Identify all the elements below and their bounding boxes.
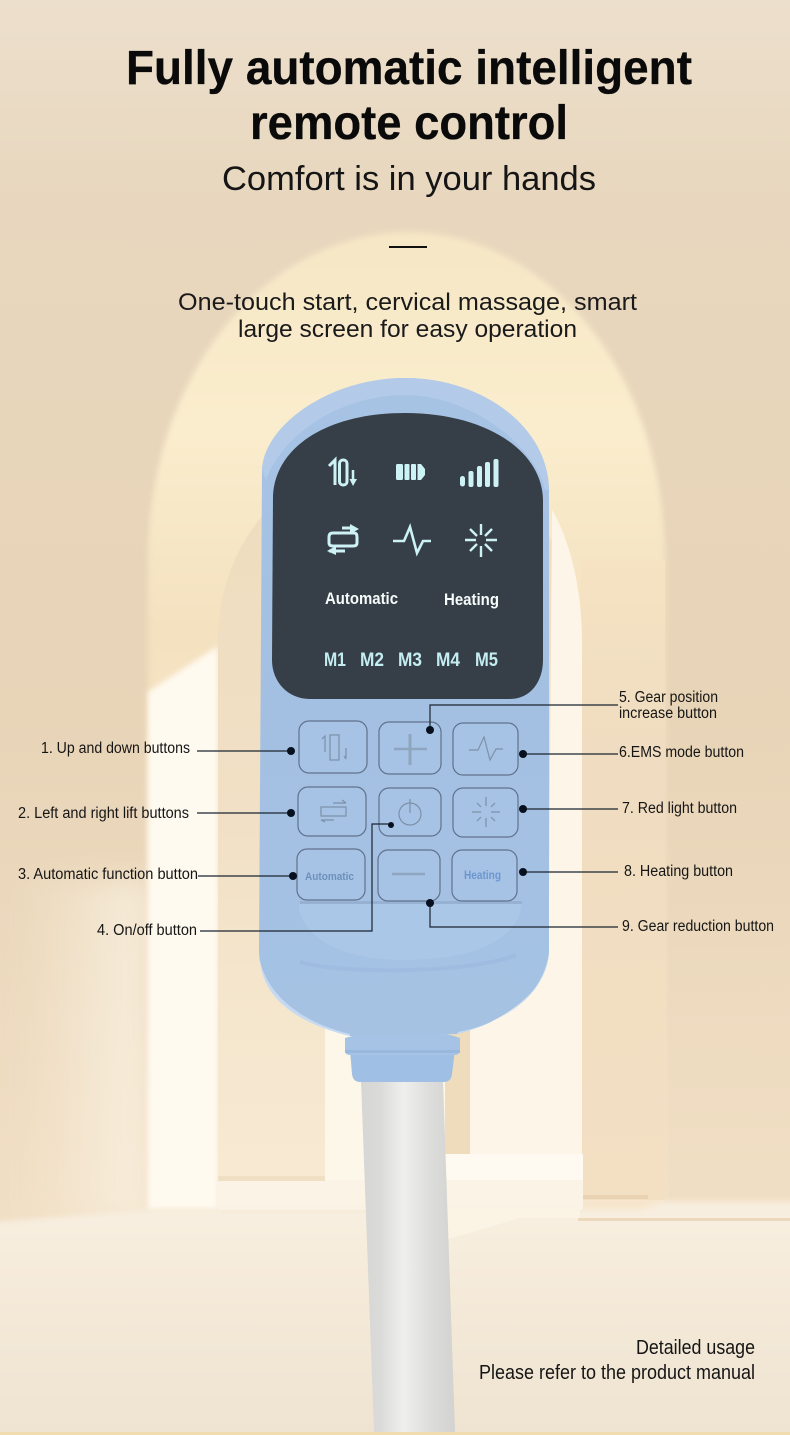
screen labels: Automatic	[325, 590, 398, 608]
icon: up down level	[329, 460, 357, 486]
buttons	[297, 721, 518, 901]
icon: pulse	[393, 527, 431, 553]
icon: sparkle	[465, 524, 497, 557]
callout labels: 1. Up and down buttons	[41, 740, 190, 757]
description text: One-touch start, cervical massage, smart	[178, 289, 637, 316]
icon: signal bars	[460, 459, 498, 487]
cable tube	[361, 1080, 455, 1432]
usage note: Detailed usage	[636, 1337, 755, 1359]
title: Fully automatic intelligent	[126, 42, 692, 95]
description text: large screen for easy operation	[238, 316, 577, 343]
callout labels	[18, 689, 774, 939]
usage note	[479, 1337, 755, 1384]
icon: swap arrows	[327, 524, 359, 555]
lower scoop panel	[299, 901, 522, 970]
memory modes: M2	[360, 650, 384, 671]
callout labels: increase button	[619, 705, 717, 722]
screen	[272, 413, 543, 699]
title: remote control	[250, 97, 568, 150]
button label: Automatic: Automatic	[305, 871, 354, 883]
callout labels: 2. Left and right lift buttons	[18, 805, 189, 822]
screen: Heating	[444, 591, 499, 609]
callout labels: 5. Gear position	[619, 689, 718, 706]
usage note: Please refer to the product manual	[479, 1362, 755, 1384]
button icons	[321, 734, 503, 874]
callout labels: 3. Automatic function button	[18, 866, 198, 883]
memory modes: M5	[475, 650, 498, 671]
callout labels: 6.EMS mode button	[619, 744, 744, 761]
divider dash	[389, 246, 427, 248]
remote body	[259, 378, 549, 1036]
subtitle: Comfort is in your hands	[222, 160, 596, 198]
description text	[178, 289, 637, 343]
memory modes: M4	[436, 650, 460, 671]
title	[126, 42, 692, 150]
button label: Heating: Heating	[464, 870, 501, 882]
callout labels: 4. On/off button	[97, 922, 197, 939]
remote control	[259, 378, 549, 1082]
memory modes: M1	[324, 650, 346, 671]
callout labels: 7. Red light button	[622, 800, 737, 817]
icon: battery	[396, 464, 425, 480]
callout labels: 9. Gear reduction button	[622, 918, 774, 935]
callout lines and dots	[197, 705, 618, 931]
connector	[345, 1030, 460, 1082]
callout labels: 8. Heating button	[624, 863, 733, 880]
memory modes: M3	[398, 650, 422, 671]
memory modes	[324, 650, 498, 671]
